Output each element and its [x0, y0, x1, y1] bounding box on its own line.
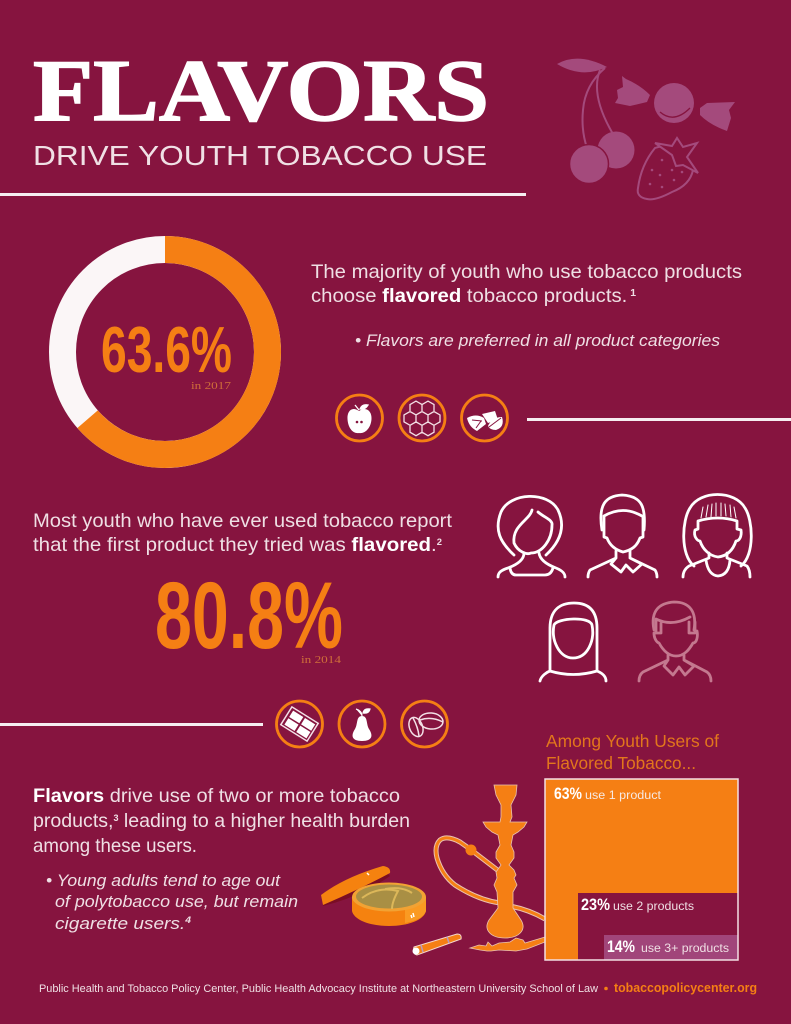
icon: cherries, candy and strawberry [557, 59, 735, 199]
divider: right [527, 418, 791, 421]
donut chart: 63.6% in 2017: 63.6% [101, 313, 232, 386]
bullet: young adults: • Young adults tend to age out [46, 872, 282, 890]
label: 63%: use 1 product [585, 790, 662, 802]
icon: hookah [436, 785, 545, 951]
icons: youth faces [498, 494, 751, 681]
text block: first product flavored: Most youth who have ever used tobacco report [33, 510, 453, 532]
label: 23%: use 2 products [613, 901, 694, 913]
text block: majority of youth: The majority of youth who use tobacco products [311, 261, 742, 283]
donut chart: 63.6% in 2017: in 2017 [191, 381, 231, 392]
heading: among youth users [546, 731, 719, 773]
icon: e-cigarette [412, 934, 461, 955]
text block: flavors drive use: among these users. [33, 835, 197, 857]
label: 63% [554, 785, 662, 803]
divider: left [0, 723, 263, 726]
text block: first product flavored: 2 [437, 537, 442, 547]
text block: flavors drive use: Flavors drive use of two or more tobacco [33, 785, 400, 807]
text block: majority of youth: choose flavored tobacco products. [311, 285, 621, 307]
icon: girl with short hair [498, 496, 565, 577]
text block: flavors drive use [33, 785, 410, 857]
title: FLAVORS [33, 43, 489, 140]
label: 14%: use 3+ products [641, 943, 729, 955]
text block: flavors drive use: products, [33, 810, 113, 832]
bullet: young adults: 4 [184, 915, 191, 925]
bullet: young adults: of polytobacco use, but remain [55, 893, 298, 911]
icon: honeycomb [399, 395, 445, 441]
icon: citrus [462, 395, 508, 441]
footer [39, 981, 757, 995]
bullet: young adults [46, 872, 298, 933]
icon: snus tin [321, 866, 426, 926]
footer: Public Health and Tobacco Policy Center, Public Health Advocacy Institute at Northeastern University School of Law [39, 983, 598, 995]
bullet: flavors preferred: • Flavors are preferred in all product categories [355, 331, 721, 350]
label: 23%: 23% [581, 896, 610, 914]
heading: among youth users: Among Youth Users of [546, 731, 719, 751]
icon: chocolate bar [276, 701, 322, 747]
text block: majority of youth: 1 [627, 288, 636, 299]
label: 14%: 14% [607, 938, 635, 956]
stat: 80.8% in 2014: in 2014 [301, 655, 342, 666]
stat: 80.8% in 2014: 80.8% [155, 563, 343, 669]
label: 14% [607, 938, 729, 956]
title: DRIVE YOUTH TOBACCO USE [33, 140, 487, 171]
icon: boy with collar [588, 495, 657, 577]
icon: coffee beans [402, 701, 448, 747]
text block: flavors drive use: leading to a higher health burden [119, 810, 410, 832]
title [33, 43, 489, 171]
icon: girl with long hair and bangs [683, 494, 751, 577]
text block: first product flavored: that the first product they tried was flavored. [33, 534, 436, 556]
bullet: young adults: cigarette users. [55, 915, 168, 933]
footer: tobaccopolicycenter.org [614, 981, 757, 995]
text block: flavors drive use: 3 [113, 813, 119, 823]
label: 23% [581, 896, 694, 914]
icon: apple [336, 395, 382, 441]
text block: majority of youth [311, 261, 742, 307]
chart: products used [545, 779, 738, 960]
stat: 80.8% in 2014 [155, 563, 343, 669]
icon: boy, faded [639, 602, 711, 681]
text block: first product flavored [33, 510, 453, 556]
top divider [0, 193, 526, 196]
label: 63%: 63% [554, 785, 582, 803]
donut chart: 63.6% in 2017 [62, 250, 268, 455]
icon: girl with headscarf [540, 603, 606, 681]
heading: among youth users: Flavored Tobacco... [546, 753, 696, 773]
icon: pear [339, 701, 385, 747]
